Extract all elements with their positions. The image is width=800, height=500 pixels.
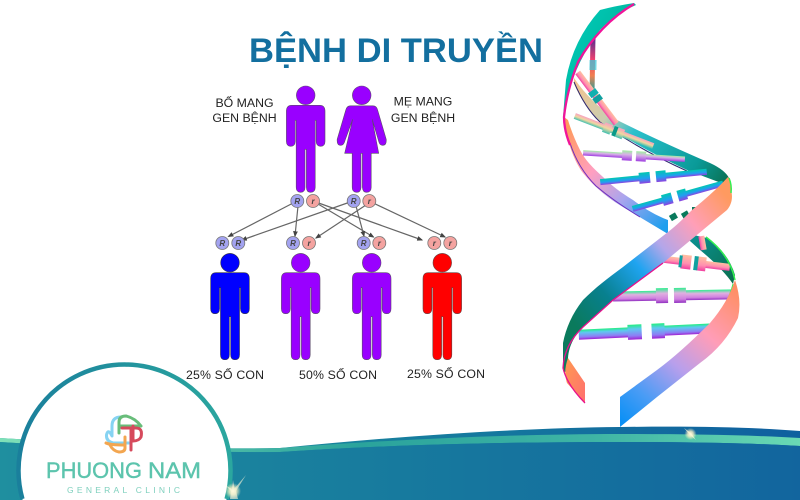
child alleles: R <box>219 239 225 248</box>
short base pair <box>698 236 707 250</box>
child alleles: r <box>378 239 382 248</box>
base pair: vertical top <box>589 38 597 92</box>
label: 50%: 50% SỐ CON <box>299 367 377 382</box>
main front band <box>563 177 732 372</box>
band pink edge <box>563 263 663 403</box>
label: father: BỐ MANG <box>215 95 274 110</box>
child figure: red <box>423 253 462 360</box>
child alleles: R <box>235 239 241 248</box>
parent alleles: R <box>351 197 357 206</box>
inheritance arrows <box>228 201 445 240</box>
top strand face <box>563 3 636 117</box>
label: father <box>212 95 277 125</box>
base pair 3 <box>631 178 725 214</box>
base pair A <box>578 321 713 342</box>
child figure: blue <box>211 253 249 360</box>
label: 25%: 25% SỐ CON <box>407 366 485 381</box>
base pair B <box>613 287 733 304</box>
child alleles: R <box>361 239 367 248</box>
icon: sparkle near logo <box>225 475 246 499</box>
label: mother: MẸ MANG <box>394 94 452 108</box>
logo name: PHUONG <box>46 458 142 483</box>
label: father: GEN BỆNH <box>212 110 277 125</box>
child alleles: r <box>449 239 453 248</box>
back strand lower <box>680 232 735 284</box>
footer wave <box>0 427 800 500</box>
DNA double helix <box>563 3 739 427</box>
left edge purple <box>570 143 640 217</box>
child alleles: R <box>290 239 296 248</box>
label: 25%: 25% SỐ CON <box>186 367 264 382</box>
parent alleles: r <box>311 197 315 206</box>
logo badge circle <box>18 365 231 500</box>
base pair 2 <box>600 166 707 188</box>
child figure: purple <box>281 253 320 360</box>
logo: Phuong Nam <box>46 416 201 495</box>
lower left front strand <box>564 117 668 234</box>
child alleles <box>216 236 457 250</box>
back strand edge <box>574 82 687 171</box>
parent alleles: R <box>294 197 300 206</box>
father figure <box>286 86 325 192</box>
title: BỆNH DI TRUYỀN <box>249 30 543 70</box>
base pair C <box>661 252 731 274</box>
icon: clinic knot mark <box>106 416 141 452</box>
lower left orange tip <box>565 358 585 403</box>
inheritance diagram <box>186 86 485 382</box>
back strand upper <box>574 78 729 184</box>
child alleles: r <box>433 239 437 248</box>
base pair: diagonal <box>574 70 620 126</box>
child figure: purple <box>352 253 391 360</box>
base pair 1 <box>583 148 685 164</box>
label: mother: GEN BỆNH <box>391 110 455 125</box>
logo tagline: GENERAL CLINIC <box>67 485 180 495</box>
icon: sparkle on wave <box>684 428 696 440</box>
top strand pink edge <box>564 4 634 145</box>
mother figure <box>337 86 386 192</box>
green edge <box>706 237 735 280</box>
lower right front strand <box>620 280 739 427</box>
child alleles: r <box>307 239 311 248</box>
parent alleles <box>291 194 376 208</box>
base pair 4 <box>573 111 655 151</box>
short dark base pair <box>669 207 696 221</box>
logo name: NAM <box>148 458 201 483</box>
parent alleles: r <box>368 197 372 206</box>
label: mother <box>391 94 455 125</box>
